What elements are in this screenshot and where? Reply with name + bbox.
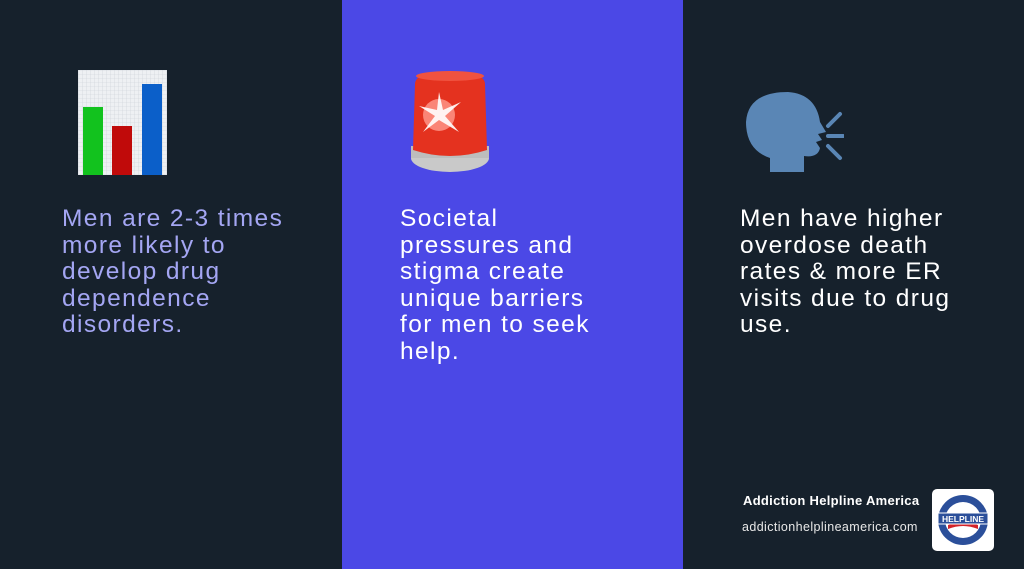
text: overdose death rates: overdose death [740,232,929,259]
text: societal pressures: for men to seek [400,311,590,338]
text: overdose death rates: visits due to drug [740,285,950,312]
logo [932,489,994,551]
icon: bar chart [78,70,167,175]
text: overdose death rates: use. [740,311,792,338]
text: overdose death rates: Men have higher [740,205,944,232]
footer: brand name: Addiction Helpline America [743,493,919,508]
logo: HELPLINE [942,514,984,524]
text: societal pressures: pressures and [400,232,573,259]
text: overdose death rates [740,205,950,338]
text: societal pressures: help. [400,338,460,365]
text: societal pressures: Societal [400,205,498,232]
text: overdose death rates: rates & more ER [740,258,942,285]
text: men 2-3 times: develop drug [62,258,220,285]
panel: left stat [0,0,341,569]
text: men 2-3 times [62,205,283,338]
text: societal pressures: unique barriers [400,285,584,312]
text: men 2-3 times: Men are 2-3 times [62,205,283,232]
icon: siren [411,71,489,172]
icon: speaking head [746,92,844,172]
footer: website: addictionhelplineamerica.com [742,520,918,534]
panel: right stat [683,0,1024,569]
text: men 2-3 times: more likely to [62,232,226,259]
text: men 2-3 times: disorders. [62,311,184,338]
panel: middle stat [342,0,683,569]
text: societal pressures: stigma create [400,258,565,285]
text: societal pressures [400,205,590,365]
text: men 2-3 times: dependence [62,285,211,312]
